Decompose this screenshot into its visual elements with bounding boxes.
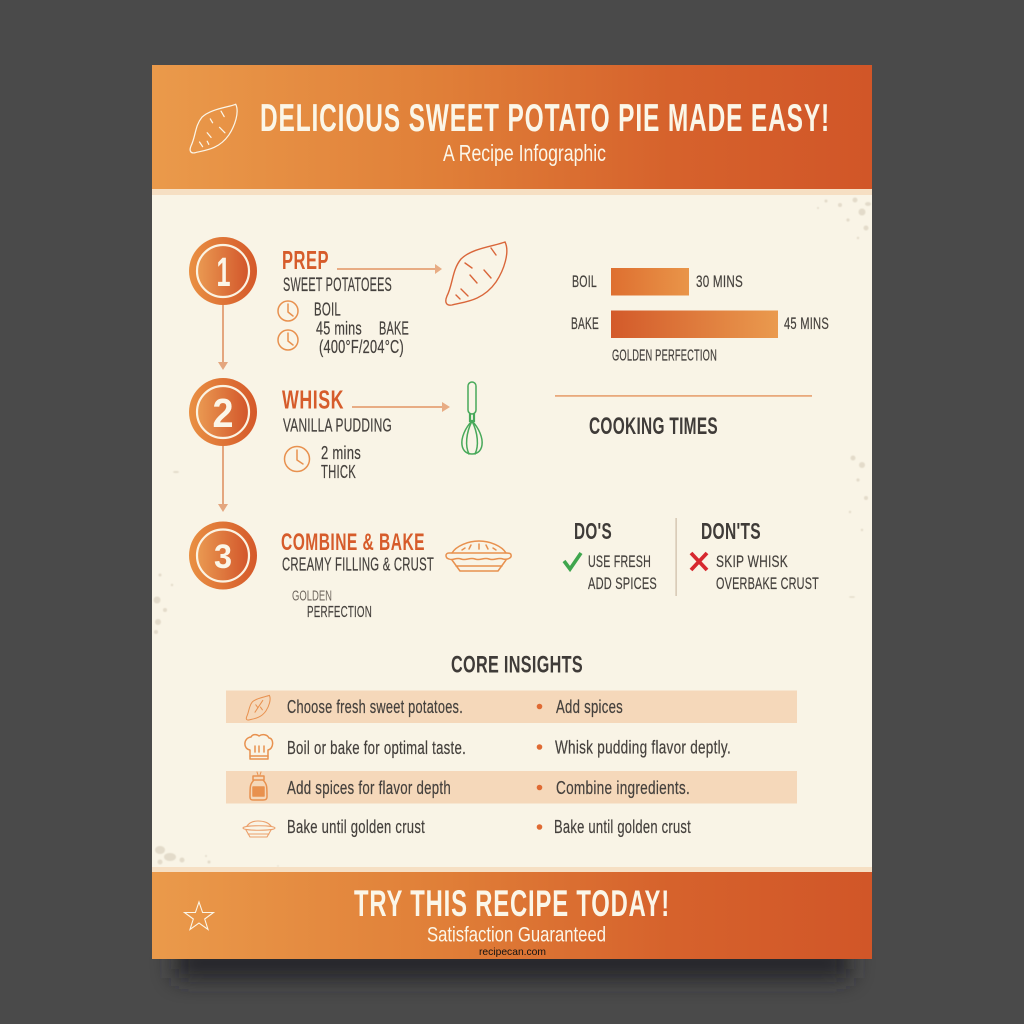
text: bake: BAKE bbox=[379, 318, 409, 338]
icon: star bbox=[184, 902, 214, 930]
text: thick: THICK bbox=[321, 462, 356, 482]
step 1: prep bbox=[189, 237, 507, 370]
icon: clock bbox=[278, 301, 298, 321]
label: bake: BAKE bbox=[571, 314, 599, 333]
text: Boil or bake for optimal taste. bbox=[287, 738, 466, 758]
text: vanilla pudding: VANILLA PUDDING bbox=[283, 414, 392, 436]
bar: bake 45 mins bbox=[611, 310, 778, 338]
number badge 2: 2 bbox=[212, 390, 234, 436]
icon: pie bbox=[446, 541, 511, 571]
caption: golden perfection: GOLDEN PERFECTION bbox=[612, 348, 717, 364]
right column of bullets: Whisk pudding flavor deptly. bbox=[555, 738, 731, 758]
heading: core insights: CORE INSIGHTS bbox=[451, 652, 583, 678]
arrow down to step 3 bbox=[218, 446, 228, 512]
number badge 2 bbox=[189, 378, 257, 446]
number badge 1 bbox=[189, 237, 257, 305]
source url: recipecan.com bbox=[479, 946, 546, 958]
panel: core insights bbox=[226, 652, 797, 837]
value: 45 mins: 45 MINS bbox=[784, 314, 829, 333]
step 2: whisk bbox=[189, 378, 482, 512]
text: golden: GOLDEN bbox=[292, 588, 332, 604]
icon: sweet potato outline bbox=[190, 104, 237, 153]
text: Add spices for flavor depth bbox=[287, 778, 451, 798]
panel: do's and don'ts bbox=[564, 518, 819, 596]
heading: combine and bake: COMBINE & BAKE bbox=[281, 529, 425, 556]
icon: whisk bbox=[462, 382, 482, 454]
number badge 3 bbox=[189, 522, 257, 590]
text: 45 mins: 45 mins bbox=[316, 318, 362, 338]
right column of bullets: Add spices bbox=[556, 697, 623, 717]
icon: cross mark bbox=[691, 553, 707, 570]
number badge 3: 3 bbox=[214, 538, 232, 576]
heading: do's: DO'S bbox=[574, 518, 612, 544]
subtitle: A Recipe Infographic bbox=[443, 140, 606, 166]
right column of bullets: Bake until golden crust bbox=[554, 817, 691, 837]
step 3: combine and bake bbox=[189, 522, 511, 621]
list: do's: USE FRESH bbox=[588, 552, 651, 571]
call to action: TRY THIS RECIPE TODAY! bbox=[354, 883, 670, 924]
list: don'ts: SKIP WHISK bbox=[716, 552, 788, 571]
icon: chef hat bbox=[245, 735, 273, 759]
list: do's bbox=[588, 552, 657, 593]
text: boil: BOIL bbox=[314, 300, 341, 320]
list: don'ts: OVERBAKE CRUST bbox=[716, 574, 819, 593]
icon: sweet potato bbox=[246, 695, 270, 720]
number badge 1: 1 bbox=[216, 249, 230, 295]
text: temperature: (400°F/204°C) bbox=[319, 337, 404, 357]
icon: check mark bbox=[564, 553, 581, 569]
value: 30 mins: 30 MINS bbox=[696, 272, 743, 291]
list: do's: ADD SPICES bbox=[588, 574, 657, 593]
heading: whisk: WHISK bbox=[282, 384, 344, 414]
tagline: Satisfaction Guaranteed bbox=[427, 924, 606, 946]
bar chart: cooking times bbox=[555, 268, 829, 440]
icon: spice jar bbox=[250, 772, 267, 800]
text: perfection: PERFECTION bbox=[307, 604, 372, 621]
text: Bake until golden crust bbox=[287, 817, 425, 837]
text: 2 mins: 2 mins bbox=[321, 443, 361, 463]
icon: clock bbox=[278, 330, 298, 350]
footer band bbox=[152, 867, 872, 959]
arrow to potato bbox=[337, 264, 442, 274]
text: creamy filling and crust: CREAMY FILLING & CRUST bbox=[282, 554, 434, 574]
text: sweet potatoes: SWEET POTATOEES bbox=[283, 275, 392, 296]
icon: sweet potato bbox=[446, 242, 507, 305]
heading: prep: PREP bbox=[282, 245, 329, 275]
label: boil: BOIL bbox=[572, 272, 597, 291]
list: don'ts bbox=[716, 552, 819, 593]
bar: boil 30 mins bbox=[611, 268, 689, 296]
poster card bbox=[152, 65, 872, 959]
text: Choose fresh sweet potatoes. bbox=[287, 697, 463, 717]
heading: don'ts: DON'TS bbox=[701, 518, 761, 544]
right column of bullets: Combine ingredients. bbox=[556, 778, 690, 798]
icon: pie bbox=[243, 821, 275, 837]
right column of bullets bbox=[537, 697, 731, 837]
arrow to whisk bbox=[352, 402, 450, 412]
arrow down to step 2 bbox=[218, 305, 228, 370]
icon: clock bbox=[284, 446, 310, 472]
heading: cooking times: COOKING TIMES bbox=[589, 413, 718, 440]
header band bbox=[152, 65, 872, 195]
